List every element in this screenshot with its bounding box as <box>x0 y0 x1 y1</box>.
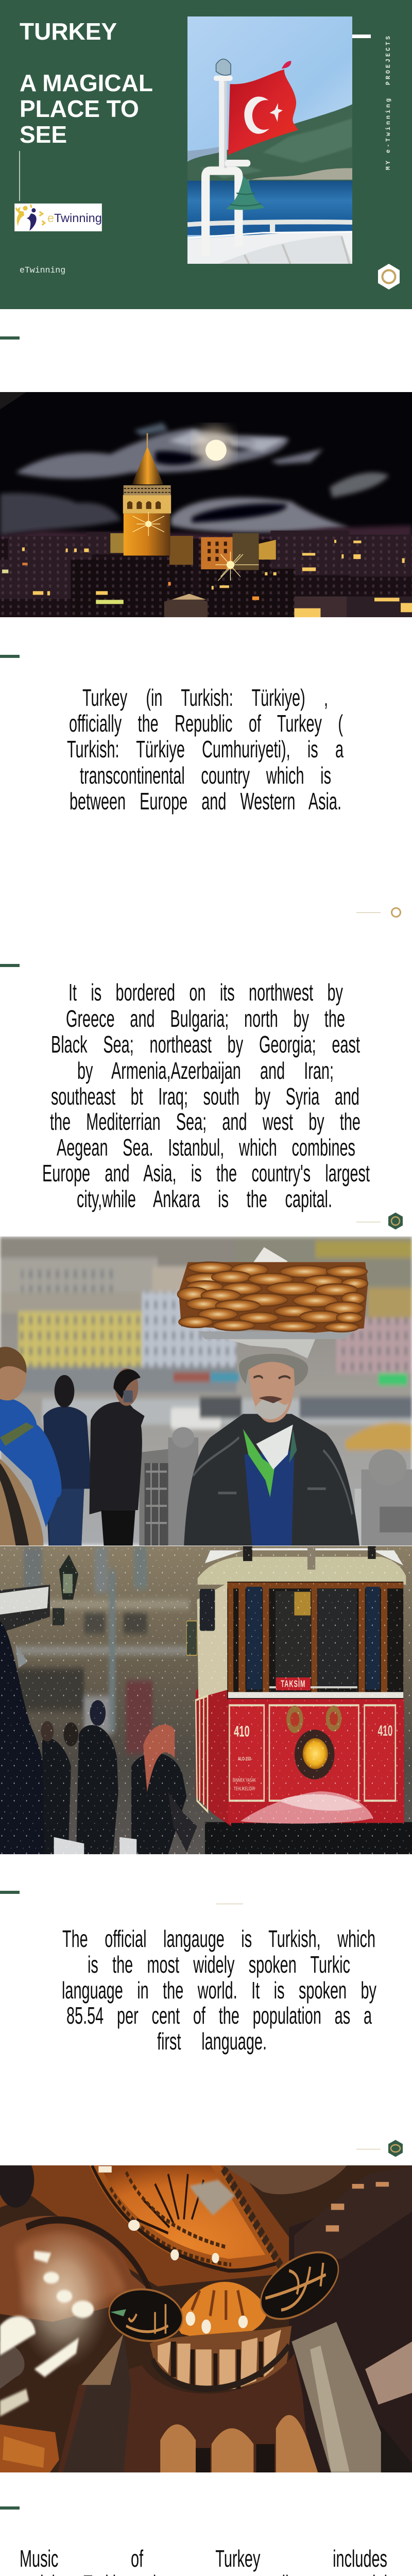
text block: introduction: officially the Republic of Turkey ( <box>69 710 343 737</box>
text block: borders: the Mediterrian Sea; and west by the <box>50 1109 360 1135</box>
text block: borders: southeast bt Iraq; south by Syria and <box>51 1083 359 1110</box>
text block: introduction: Turkey (in Turkish: Türkiye) , <box>82 684 328 711</box>
green tick <box>0 655 20 658</box>
green tick <box>0 336 20 340</box>
photo: Galata Tower at night <box>0 392 412 617</box>
title <box>20 18 153 148</box>
text block: borders: by Armenia,Azerbaijan and Iran; <box>77 1057 334 1084</box>
title: TURKEY <box>20 18 117 45</box>
text block: introduction: between Europe and Western Asia. <box>70 788 341 815</box>
white tick <box>352 35 371 38</box>
text block: language <box>62 1926 376 2055</box>
logo: eTwinning <box>14 204 102 231</box>
icon: hexagon <box>378 264 400 290</box>
text block: borders: It is bordered on its northwest by <box>68 979 343 1006</box>
decoration: line and hexagon <box>356 1213 403 1229</box>
photo: red Taksim tram in snow: 410 <box>234 1723 250 1740</box>
text block: language: language in the world. It is spoken by <box>62 1977 376 2004</box>
photo: simit seller on Galata Bridge <box>0 1236 412 1546</box>
text block: language: 85.54 per cent of the population as a <box>66 2002 372 2029</box>
photo: red Taksim tram in snow: TAKSİM <box>281 1679 306 1689</box>
green tick <box>0 2506 20 2510</box>
vertical text: MY e-Twinning PROEJECTS <box>385 34 392 170</box>
photo: red Taksim tram in snow <box>0 1546 412 1854</box>
text block: borders: Aegean Sea. Istanbul, which combines <box>57 1134 355 1161</box>
logo: eTwinning: eTwinning <box>47 211 102 225</box>
text block: borders: Europe and Asia, is the country's largest <box>42 1160 370 1187</box>
text block: borders: Greece and Bulgaria; north by the <box>66 1006 345 1032</box>
text block: introduction <box>67 684 344 815</box>
photo: red Taksim tram in snow: ALO-153 <box>238 1756 251 1762</box>
decoration: line and circle <box>356 907 401 918</box>
divider line <box>19 151 20 201</box>
text block: music: Music of Turkey includes <box>20 2545 387 2572</box>
decoration: line and hexagon <box>356 2140 403 2157</box>
text block: introduction: Turkish: Türkiye Cumhuriyeti), is a <box>67 736 344 762</box>
caption: eTwinning: eTwinning <box>20 265 65 275</box>
green tick <box>0 1891 20 1894</box>
title: PLACE TO <box>20 95 139 122</box>
text block: introduction: transcontinental country which is <box>80 762 331 789</box>
photo: red Taksim tram in snow: TEHLİKELİDİR <box>234 1786 255 1792</box>
text block: language: The official langauge is Turkish, which <box>62 1926 375 1952</box>
text block: borders: city,while Ankara is the capital. <box>77 1186 332 1212</box>
photo: Hagia Sophia interior <box>0 2165 412 2472</box>
title: SEE <box>20 121 67 148</box>
title: A MAGICAL <box>20 70 153 96</box>
photo: red Taksim tram in snow: 410 <box>377 1723 392 1739</box>
photo: red Taksim tram in snow: BINMEK YASAK <box>233 1777 256 1783</box>
text block: language: is the most widely spoken Turkic <box>88 1952 350 1978</box>
green tick <box>0 964 20 967</box>
text block: language: first language. <box>157 2028 267 2055</box>
panel: cover <box>0 0 412 309</box>
photo: Turkish flag on a boat <box>187 16 352 264</box>
text block: borders: Black Sea; northeast by Georgia; east <box>51 1031 360 1058</box>
text block: borders <box>42 979 370 1212</box>
